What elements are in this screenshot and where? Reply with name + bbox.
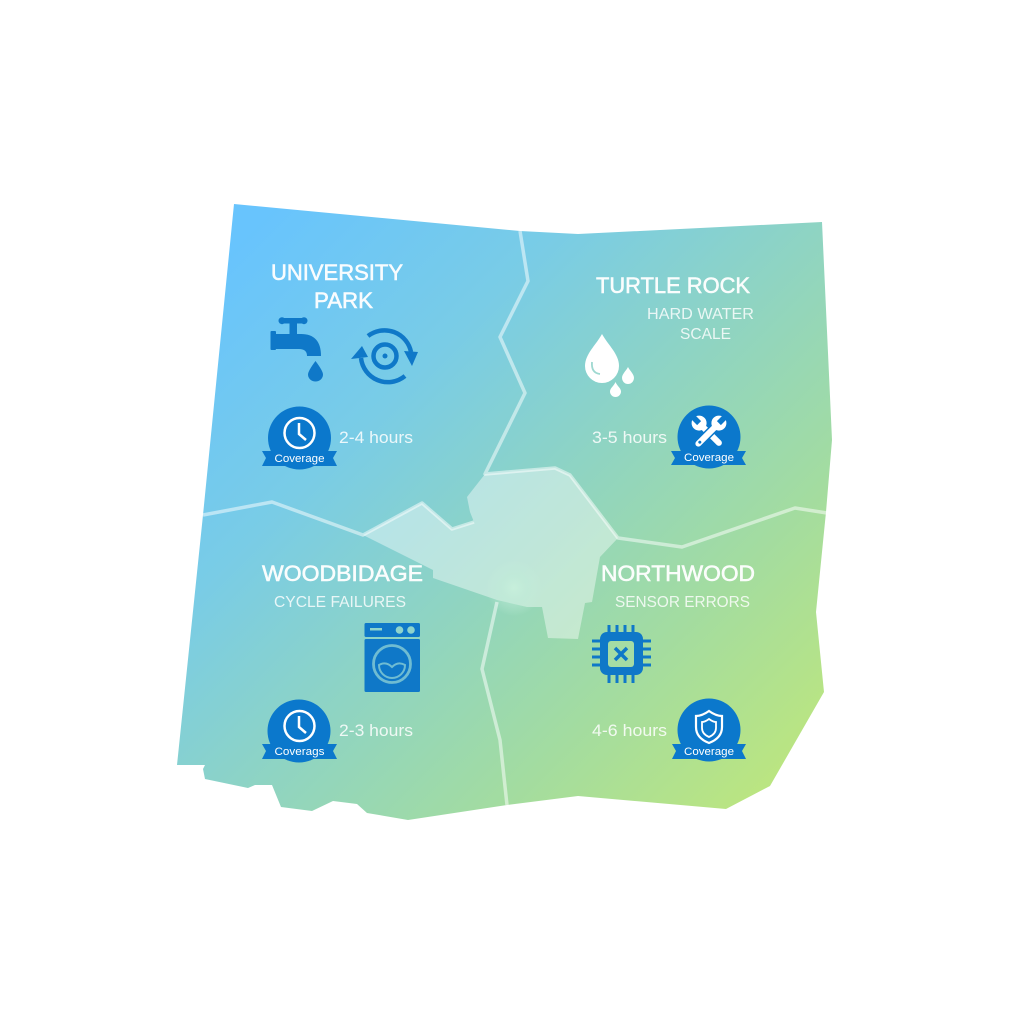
coverage badge: crossed wrenches: Coverage xyxy=(684,452,734,464)
repair time: 4-6 hours xyxy=(592,721,667,740)
region border lines xyxy=(203,231,827,805)
subheading: cycle failures: CYCLE FAILURES xyxy=(274,594,406,611)
map of four service regions xyxy=(177,204,832,820)
icon: water drops xyxy=(585,334,634,397)
map base shape xyxy=(177,204,832,820)
coverage badge: crossed wrenches xyxy=(671,406,746,468)
icon: rotating cycle arrows xyxy=(351,330,418,382)
heading: University Park: UNIVERSITY xyxy=(271,260,403,285)
heading: University Park: PARK xyxy=(314,288,373,313)
panel: Northwood xyxy=(592,561,755,762)
subheading: sensor errors: SENSOR ERRORS xyxy=(615,594,750,611)
repair time: 2-4 hours xyxy=(339,428,413,447)
subheading: hard water scale xyxy=(647,306,754,343)
panel: Woodbidage xyxy=(262,561,423,762)
heading: Northwood: NORTHWOOD xyxy=(601,561,755,586)
heading: Turtle Rock: TURTLE ROCK xyxy=(596,273,750,298)
repair time: 3-5 hours xyxy=(592,428,667,447)
heading: University Park xyxy=(271,260,403,313)
coverage badge: clock: Coverags xyxy=(274,746,325,758)
coverage badge: clock: Coverage xyxy=(274,453,324,465)
repair time: 2-3 hours xyxy=(339,721,413,740)
panel: University Park xyxy=(262,260,418,470)
panel: Turtle Rock xyxy=(585,273,754,468)
coverage badge: shield xyxy=(672,698,746,762)
central shared area xyxy=(363,468,618,639)
coverage badge: shield: Coverage xyxy=(684,746,734,758)
icon: dripping faucet xyxy=(270,317,323,382)
icon: washing machine xyxy=(364,623,420,692)
subheading: hard water scale: SCALE xyxy=(680,326,731,343)
coverage badge: clock xyxy=(262,406,337,470)
icon: faulty microchip xyxy=(592,625,651,683)
coverage badge: clock xyxy=(262,700,337,762)
subheading: hard water scale: HARD WATER xyxy=(647,306,754,323)
central glow xyxy=(486,560,542,616)
heading: Woodbidage: WOODBIDAGE xyxy=(262,561,423,586)
